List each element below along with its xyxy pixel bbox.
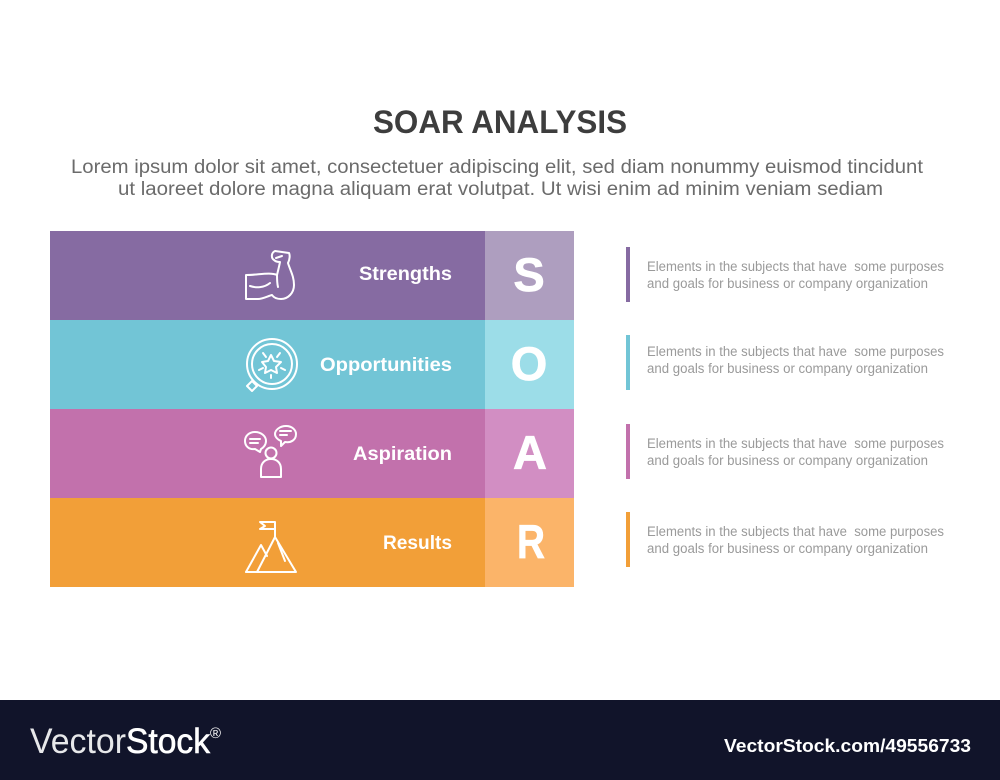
- footer logo: Vector: [30, 722, 126, 761]
- icon: person with speech bubbles: [245, 426, 296, 477]
- letter: S: S: [513, 248, 545, 301]
- description: strengths: [626, 247, 944, 302]
- footer logo: [30, 722, 221, 761]
- subtitle text block: [71, 157, 924, 200]
- description: aspiration: Elements in the subjects that have some purposes: [647, 436, 944, 451]
- letter: R: R: [517, 515, 545, 568]
- description: results: and goals for business or company organization: [647, 541, 928, 556]
- description: aspiration: and goals for business or company organization: [647, 453, 928, 468]
- label: Results: Results: [383, 533, 452, 554]
- icon: mountain with flag: [246, 522, 296, 572]
- subtitle text block: ut laoreet dolore magna aliquam erat volutpat. Ut wisi enim ad minim veniam sediam: [118, 179, 883, 200]
- panel: aspiration row: [50, 409, 574, 498]
- panel: opportunities row: [50, 320, 574, 409]
- description: aspiration: [626, 424, 944, 479]
- description: strengths: Elements in the subjects that have some purposes: [647, 259, 944, 274]
- letter: A: A: [513, 426, 547, 479]
- icon: magnifier with star: [247, 339, 297, 391]
- label: Opportunities: Opportunities: [320, 355, 452, 376]
- description: opportunities: and goals for business or company organization: [647, 361, 928, 376]
- description: results: [626, 512, 944, 567]
- title: SOAR ANALYSIS: [373, 104, 627, 140]
- icon: flexed arm: [246, 251, 294, 299]
- subtitle text block: Lorem ipsum dolor sit amet, consectetuer adipiscing elit, sed diam nonummy euismod tincidunt: [71, 157, 924, 178]
- description: results: Elements in the subjects that have some purposes: [647, 524, 944, 539]
- label: Strengths: Strengths: [359, 264, 452, 285]
- footer logo: Stock: [126, 722, 210, 761]
- letter: O: O: [511, 337, 547, 390]
- footer banner: [0, 700, 1000, 780]
- label: Aspiration: Aspiration: [353, 444, 452, 465]
- description: strengths: and goals for business or company organization: [647, 276, 928, 291]
- description: opportunities: [626, 335, 944, 390]
- panel: strengths row: [50, 231, 574, 320]
- panel: results row: [50, 498, 574, 587]
- footer image id: VectorStock.com/49556733: [724, 736, 971, 756]
- description: opportunities: Elements in the subjects that have some purposes: [647, 344, 944, 359]
- footer logo: ®: [210, 725, 221, 742]
